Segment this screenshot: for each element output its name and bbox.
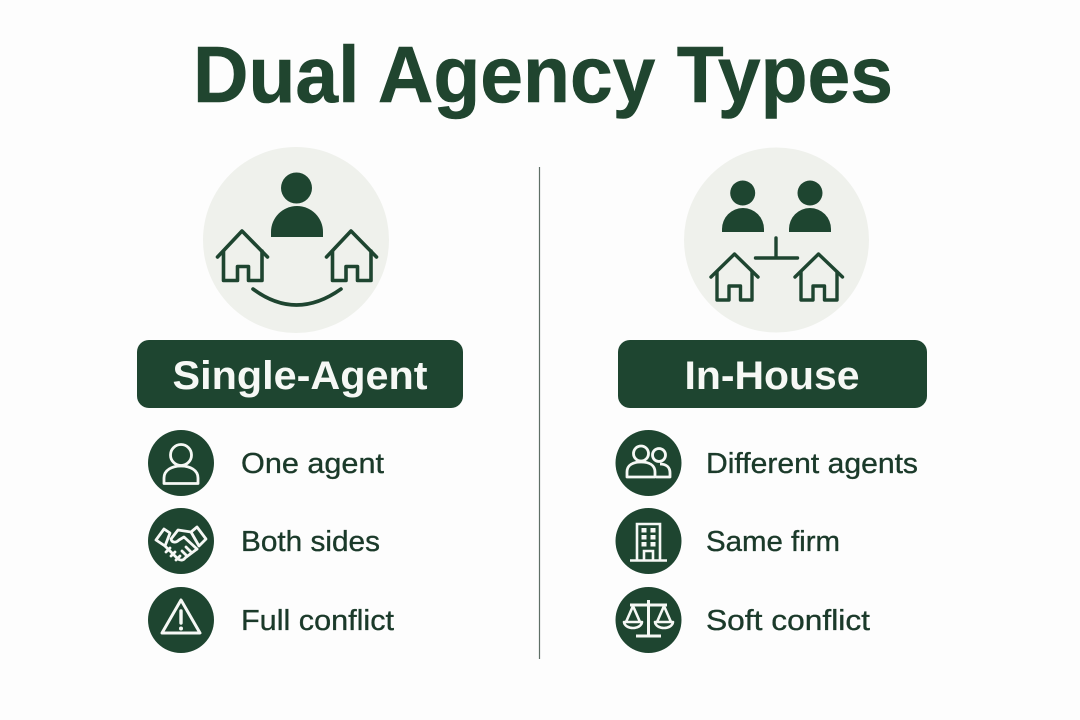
icon: different agents bbox=[616, 430, 682, 496]
label: Same firm: Same firm bbox=[706, 526, 840, 558]
title: Dual Agency Types bbox=[193, 30, 893, 119]
icon: two agents with two houses bbox=[684, 148, 869, 332]
heading pill: In-House: In-House bbox=[684, 354, 860, 398]
icon: handshake bbox=[148, 508, 214, 574]
label: Different agents: Different agents bbox=[706, 448, 918, 480]
icon: one agent bbox=[148, 430, 214, 496]
heading pill: Single-Agent: Single-Agent bbox=[172, 354, 428, 398]
icon: office building bbox=[616, 508, 682, 574]
label: Full conflict: Full conflict bbox=[241, 605, 394, 637]
label: One agent: One agent bbox=[241, 448, 384, 480]
icon: warning triangle bbox=[148, 587, 214, 653]
icon: single agent with two houses bbox=[203, 147, 389, 333]
heading pill: Single-Agent bbox=[137, 340, 463, 408]
icon: balance scales bbox=[616, 587, 682, 653]
label: Both sides: Both sides bbox=[241, 526, 380, 558]
heading pill: In-House bbox=[618, 340, 927, 408]
label: Soft conflict: Soft conflict bbox=[706, 605, 870, 637]
